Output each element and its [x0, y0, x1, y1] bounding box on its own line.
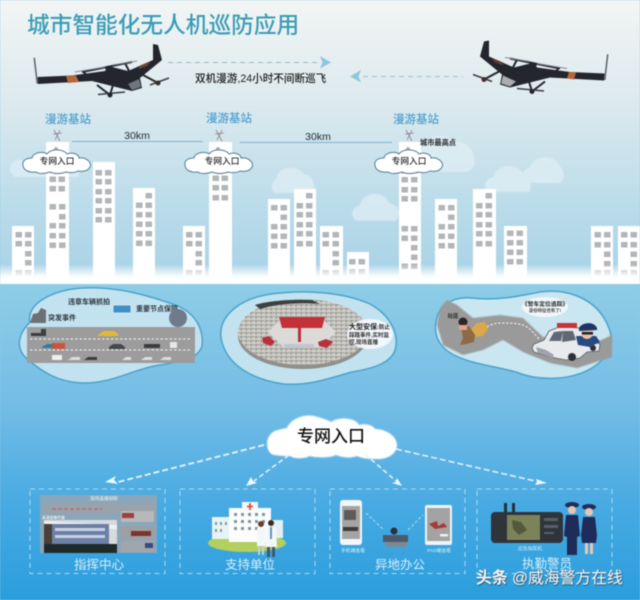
label: emergency terminal: 应急指挥机 [518, 545, 542, 552]
label: officers on duty: 执勤警员 [522, 556, 572, 571]
distance line 1 [72, 130, 203, 142]
road [437, 300, 612, 368]
figure: female officer [581, 504, 597, 554]
figure: police officer [576, 323, 600, 347]
base station 1: 专网入口 [40, 155, 74, 166]
label: key node protection: 重要节点保障 [136, 304, 178, 313]
figure: doctors [257, 520, 277, 557]
distance line 1: 30km [124, 130, 150, 142]
panel: stadium scene [221, 292, 396, 384]
drone: left [34, 44, 169, 98]
cloud: private network entrance: 专网入口 [297, 427, 365, 446]
label: command center: 指挥中心 [74, 557, 124, 572]
base station 2 [185, 111, 252, 174]
building 3 [93, 162, 115, 282]
icon: desk worker [383, 528, 408, 547]
command center image [40, 495, 157, 553]
building 13 [473, 189, 496, 282]
base station 2: 专网入口 [205, 155, 239, 166]
base station 3 [375, 112, 442, 174]
label: tablet view: PAD端查看 [427, 547, 451, 554]
dashed link: phone to desk [366, 513, 384, 530]
building 14 [504, 226, 527, 282]
distance line 2: 30km [305, 131, 331, 143]
dashed pursuit trail [487, 323, 540, 340]
callout: large event security: 控,现场直播 [349, 338, 379, 346]
label: city highest point: 城市最高点 [420, 138, 456, 147]
building 9 [320, 226, 343, 282]
arrow: to command center [105, 445, 264, 484]
pale background clouds [10, 136, 564, 221]
base station 2: 漫游基站 [206, 111, 252, 125]
building 10 [347, 252, 369, 282]
title: 城市智能化无人机巡防应用 [27, 12, 299, 38]
panel: police pursuit scene [436, 291, 612, 378]
label: emergencies: 突发事件 [48, 313, 76, 322]
watermark: 头条 @威海警方在线 [476, 568, 623, 587]
icon: incident [30, 308, 46, 323]
panel: support units [180, 489, 315, 574]
building 16 [618, 226, 640, 282]
callout: police car tracking [522, 297, 568, 317]
icon: tablet [425, 505, 452, 545]
figure: police car [532, 323, 600, 361]
panel: remote office [330, 489, 465, 574]
callout: large event security: 大型安保:防止 [349, 322, 390, 331]
callout: large event security: 踩踏事件,实时监 [349, 331, 390, 339]
arrow: to remote office [365, 454, 402, 486]
camera sign [113, 305, 131, 313]
building 8 [294, 189, 316, 282]
base station 1 [23, 112, 91, 174]
building 4 [133, 188, 155, 282]
base station 3: 专网入口 [392, 155, 426, 166]
figure: male officer [564, 502, 580, 555]
arrow: to officers on duty [396, 449, 547, 485]
background: blue lower section [0, 284, 640, 600]
building 5 [183, 226, 205, 282]
label: phone view: 手机端查看 [341, 547, 365, 554]
arrow: dashed flight path right [168, 56, 331, 68]
building 6 [209, 142, 232, 282]
base station 1: 漫游基站 [45, 112, 91, 126]
figure: fleeing suspect [458, 318, 488, 345]
label: suspect: 劫匪 [447, 312, 459, 320]
cloud: private network entrance [267, 416, 397, 459]
building 1 [12, 226, 34, 282]
arrow: to support units [246, 455, 289, 486]
icon: control terminal [491, 503, 563, 543]
building 7 [268, 199, 290, 282]
road [27, 327, 195, 363]
command center image: 现场直播视频 [90, 495, 118, 502]
dashed link: desk to tablet [408, 515, 423, 530]
callout: police car tracking: 《警车定位追踪》 [522, 300, 568, 308]
background: sky [0, 0, 640, 284]
callout: police car tracking: 身份特征也有了! [529, 307, 562, 314]
building 12 [435, 199, 457, 282]
drone: right [473, 40, 608, 94]
panel: command center [30, 489, 165, 574]
callout: large event security [347, 319, 393, 349]
stadium [238, 299, 368, 369]
command center image: 高清图像传输 [42, 515, 65, 520]
building 15 [591, 226, 613, 282]
icon: hospital [208, 502, 286, 552]
building 2 [46, 142, 69, 282]
base station 3: 漫游基站 [393, 112, 439, 126]
icon: key node [169, 309, 187, 327]
panel: traffic scene [19, 288, 202, 383]
label: support units: 支持单位 [225, 557, 275, 572]
panel: officers on duty [477, 489, 612, 574]
building 11 [399, 142, 421, 282]
icon: phone [340, 500, 362, 545]
label: traffic violation: 违章车辆抓拍 [68, 297, 110, 306]
white ground haze [0, 264, 640, 284]
label: remote office: 异地办公 [375, 557, 425, 572]
arrow: dashed flight path left [350, 70, 463, 82]
caption: dual drone patrol: 双机漫游,24小时不间断巡飞 [195, 72, 327, 85]
